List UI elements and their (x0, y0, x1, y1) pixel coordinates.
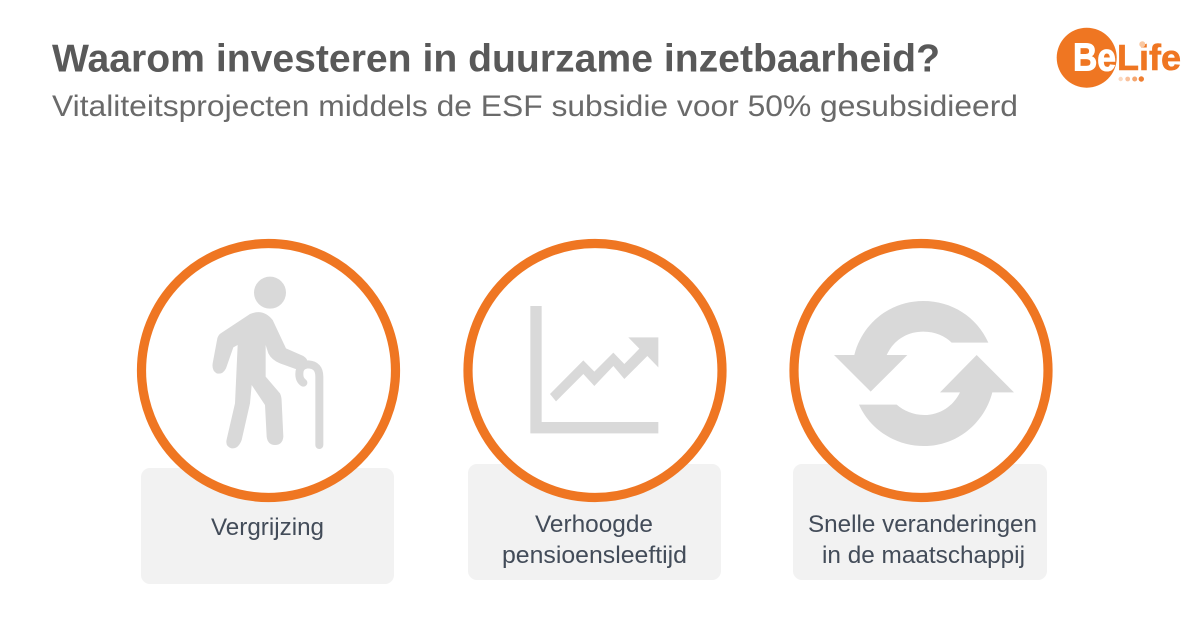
icon: rising line chart (530, 306, 658, 433)
circle: Snelle veranderingen in de maatschappij (794, 244, 1048, 498)
logo: BeLife (1057, 28, 1181, 88)
circle: Verhoogde pensioensleeftijd (468, 244, 722, 498)
label: Snelle veranderingen in de maatschappij: in de maatschappij (822, 542, 1025, 569)
icon: circular arrows (834, 301, 1014, 446)
label box: Vergrijzing (141, 468, 394, 584)
label: Vergrijzing: Vergrijzing (211, 514, 324, 541)
circle: Vergrijzing (142, 244, 396, 498)
label: Snelle veranderingen in de maatschappij (808, 511, 1037, 569)
panel: Vergrijzing (141, 244, 396, 584)
label: Verhoogde pensioensleeftijd (502, 511, 687, 569)
label box: Snelle veranderingen in de maatschappij (793, 464, 1047, 580)
label box: Verhoogde pensioensleeftijd (468, 464, 721, 580)
title: Waarom investeren in duurzame inzetbaarheid? (52, 38, 940, 80)
label: Verhoogde pensioensleeftijd: pensioensleeftijd (502, 542, 687, 569)
logo: BeLife: Be (1073, 37, 1116, 80)
panel: Snelle veranderingen in de maatschappij (793, 244, 1048, 580)
label: Snelle veranderingen in de maatschappij: Snelle veranderingen (808, 511, 1037, 538)
icon: elderly person with cane (212, 277, 319, 448)
label: Verhoogde pensioensleeftijd: Verhoogde (535, 511, 653, 538)
logo: BeLife: Life (1117, 37, 1181, 78)
subtitle: Vitaliteitsprojecten middels de ESF subsidie voor 50% gesubsidieerd (52, 90, 1018, 123)
panel: Verhoogde pensioensleeftijd (468, 244, 722, 580)
